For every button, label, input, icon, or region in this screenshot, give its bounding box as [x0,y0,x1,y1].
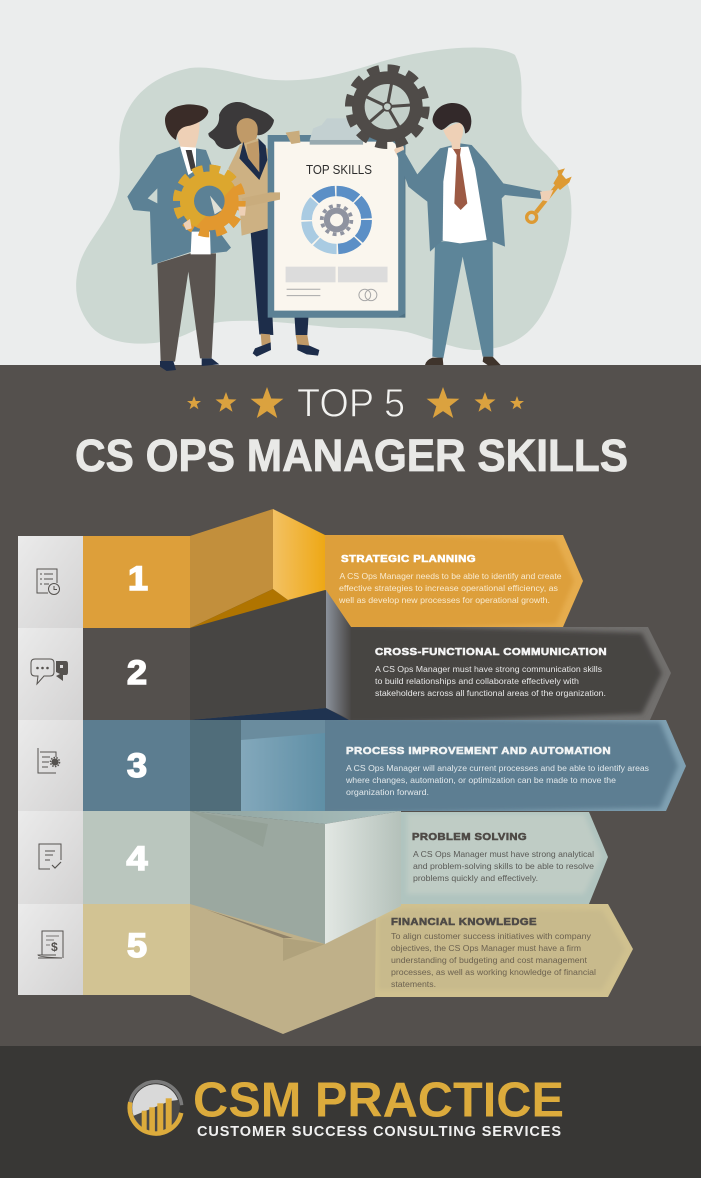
left man shirt [180,147,197,177]
clipboard [268,118,405,318]
logo bars [142,1098,172,1132]
woman arm [242,192,280,207]
person: right man with gear and wrench [349,68,572,366]
text 1: A CS Ops Manager needs to be able to identify and create [340,571,562,581]
text 5: objectives, the CS Ops Manager must have a firm [391,943,581,953]
number 3: 3 [127,747,147,785]
arrow 5 [375,904,633,997]
left man shirt lower [191,232,211,254]
left man trousers [157,253,216,362]
woman far ankle [296,335,309,347]
text 1: effective strategies to increase operational efficiency, as [339,583,558,593]
stars left [187,387,283,418]
arrow 3 [325,720,686,811]
woman hair [208,102,274,149]
heading 4: PROBLEM SOLVING [412,831,527,843]
text 2 [375,664,606,698]
arrow 2 [351,627,671,720]
woman face [237,118,258,147]
grey placeholder boxes [286,267,388,282]
text 5: To align customer success initiatives with company [391,931,592,941]
text 4: and problem-solving skills to be able to resolve [413,861,594,871]
board back shadow [274,142,405,318]
fold 2 [190,590,326,720]
row 3: process improvement [83,716,686,814]
paper sheet [274,142,398,311]
woman neck [247,141,260,175]
text 2: to build relationships and collaborate effectively with [375,676,579,686]
person: left man with gear [127,104,280,371]
right man neck and face [443,123,463,149]
woman ankle [261,334,271,346]
fold 2 navy shadow [190,708,349,720]
heading: cs ops manager skills: CS OPS MANAGER SKILLS [75,430,628,481]
logo grey arc [130,1082,182,1105]
heading 1: STRATEGIC PLANNING [341,553,476,565]
board label: TOP SKILLS [306,163,372,177]
logo gold arc [130,1102,181,1134]
number 1: 1 [128,560,148,598]
signature lines [287,289,320,296]
text 1: well as develop new processes for operational growth. [338,595,550,605]
number cell 1 [83,536,190,628]
arrow 5 inner shade [383,922,384,985]
text 5: understanding of budgeting and cost management [391,955,588,965]
icon: document with check [39,844,61,869]
fold 5 [190,904,401,1034]
arrow 2 inner [345,624,662,724]
arrow 4 [401,812,608,904]
number 5: 5 [127,927,147,965]
background: footer band [0,1046,701,1178]
fold 4 sheen [190,811,401,824]
fold 4 facet [190,811,268,847]
heading 5: FINANCIAL KNOWLEDGE [391,916,537,928]
wrench [527,168,572,222]
fold 1 light panel [273,509,325,600]
row 4: problem solving [83,811,608,944]
text 2: A CS Ops Manager must have strong communication skills [375,664,602,674]
logo disc [132,1084,179,1131]
right man tie [453,148,467,210]
large dark gear [349,68,426,145]
woman trousers [251,228,273,335]
left man shoes [160,358,219,371]
row 5: financial knowledge [83,904,633,1034]
illustration: team holding top skills board [76,47,572,371]
icon: checklist with clock [37,569,60,594]
fold 4 sliver shadow [205,909,293,938]
hand on board [286,131,300,144]
progress ring [307,191,367,249]
right man hand [394,141,404,157]
board frame [268,135,405,318]
ring gear [322,206,351,234]
fold 3 dark part [190,720,241,811]
row 2: cross-functional communication [127,590,671,720]
blob backdrop [76,47,571,350]
number 2: 2 [127,654,147,692]
background: light top area [0,0,701,365]
woman shoe [253,342,271,357]
board clip [310,118,363,140]
left man tie [186,150,196,171]
woman far shoe [297,344,319,356]
right man trousers [432,240,493,358]
number 4: 4 [126,840,148,878]
number cell 4 [83,811,190,904]
footer brand name: CSM PRACTICE [193,1074,564,1128]
text 3 [345,763,649,797]
text 3: where changes, automation, or optimization can be made to move the [345,775,616,785]
text 5 [391,931,596,989]
person: woman [208,102,319,357]
icon: invoice with dollar sign: $ [51,940,58,954]
fold 1 [190,509,273,628]
right man hair [433,103,471,133]
text 4 [413,849,594,883]
right man jacket [397,143,542,252]
orange gear [177,168,242,234]
fold 3 top shade [241,720,325,740]
logo dark wedge [133,1100,179,1132]
woman jacket [228,138,268,236]
fold 4 [190,811,325,944]
arrow 1 [325,535,583,627]
text 5: processes, as well as working knowledge of financial [391,967,596,977]
icon: invoice with dollar sign [38,931,63,958]
fold 3 light part [241,720,325,811]
left man hands [183,207,246,230]
left man hair [165,104,208,140]
arrow 1 inner [318,532,574,630]
text 4: problems quickly and effectively. [413,873,538,883]
icon: process document with gear [38,748,60,773]
fold 2 bevel [326,590,351,720]
stamp circles [359,289,377,301]
number cell 5 [83,904,190,995]
fold 5 inner shadow [283,938,325,961]
text 4: A CS Ops Manager must have strong analytical [413,849,594,859]
footer tagline: CUSTOMER SUCCESS CONSULTING SERVICES [197,1124,561,1140]
text 2: stakeholders across all functional areas of the organization. [375,688,606,698]
arrow 4 inner [407,814,602,894]
right man shirt [443,147,487,243]
woman far leg [294,308,309,335]
heading 3: PROCESS IMPROVEMENT AND AUTOMATION [346,745,611,757]
left man jacket [127,147,231,265]
background: dark main section [0,365,701,1046]
icon: chat bubbles [31,659,68,684]
number cell 2 [83,628,190,720]
number cell 3 [83,720,190,811]
heading: top 5: TOP 5 [297,382,405,426]
footer logo mark [130,1082,182,1134]
text 3: A CS Ops Manager will analyze current processes and be able to identify areas [346,763,649,773]
fold 4 light panel [325,811,401,944]
fold 1 shadow [190,589,320,628]
text 5: statements. [391,979,436,989]
left man neck and face [177,121,199,150]
stars right [427,387,524,418]
text 1 [338,571,562,605]
row 1: strategic planning [83,509,583,630]
right man shoes [425,357,501,366]
woman collar [239,138,267,180]
text 3: organization forward. [346,787,429,797]
arrow 3 inner [318,716,678,814]
icon column [18,536,83,995]
heading 2: CROSS-FUNCTIONAL COMMUNICATION [375,646,607,658]
